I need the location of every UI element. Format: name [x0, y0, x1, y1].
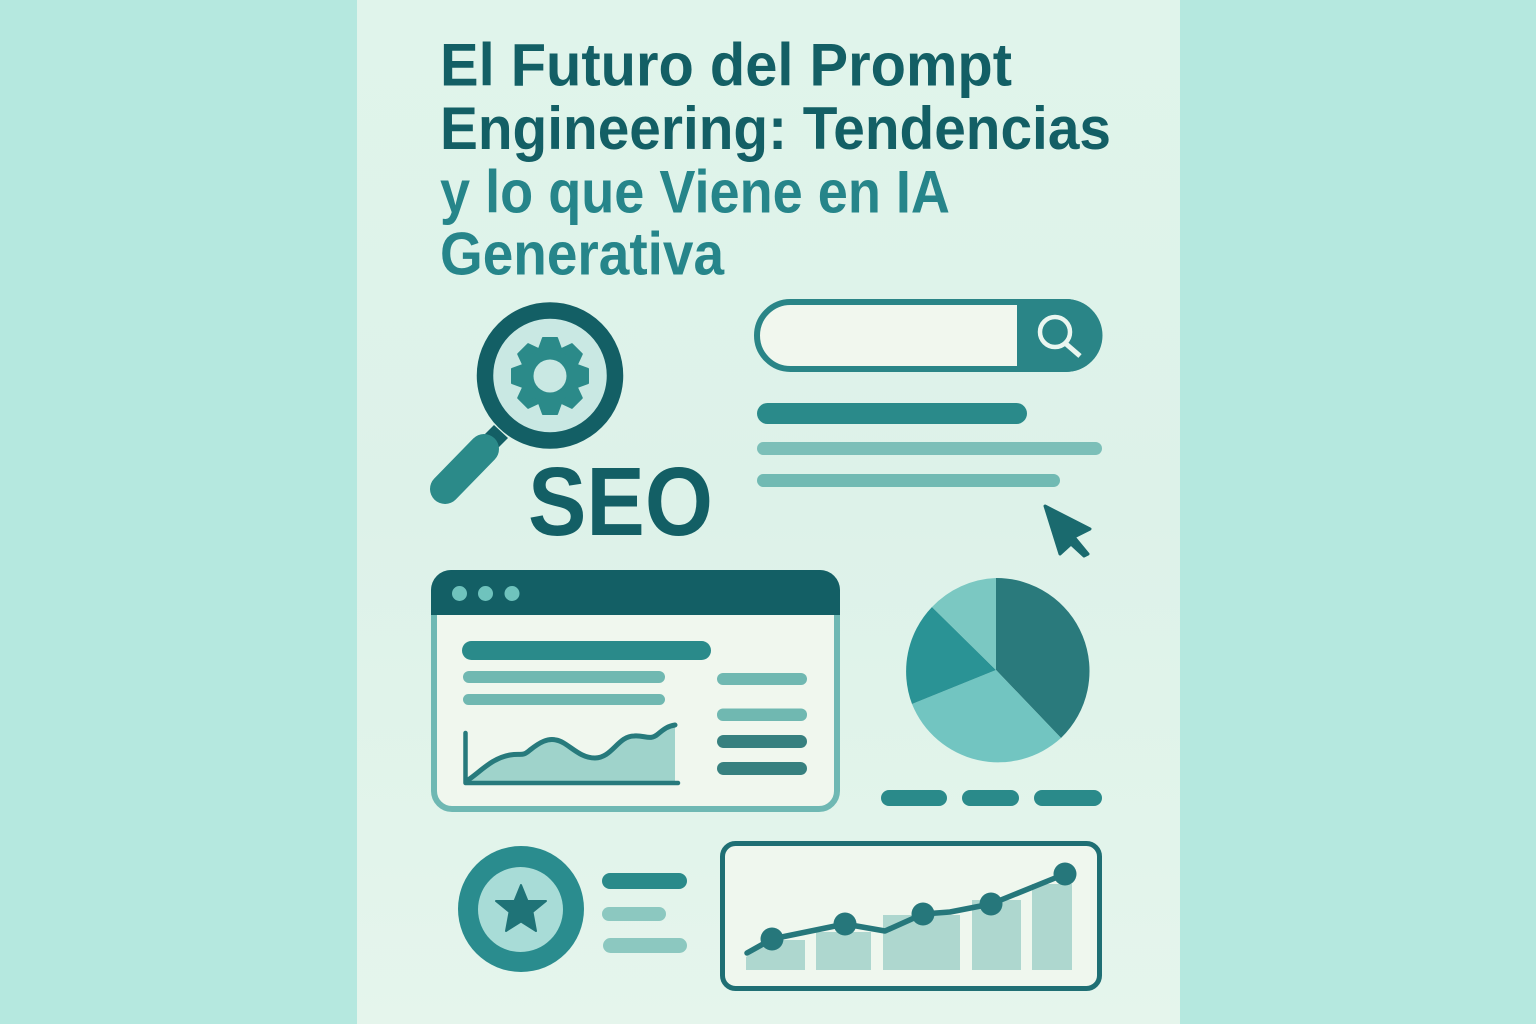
icon: star badge: [458, 846, 584, 972]
title: El Futuro del Prompt: [440, 32, 1012, 98]
icon: magnifying glass with gear: [445, 310, 615, 489]
icon: cursor arrow: [1045, 506, 1090, 556]
pie chart: [906, 578, 1090, 762]
content lines: [462, 641, 711, 705]
central panel: [357, 0, 1180, 1024]
trend line: [747, 874, 1065, 953]
pie legend pills: [881, 790, 1102, 806]
title: Generativa: [440, 220, 725, 288]
data points: [760, 862, 1076, 950]
search result lines: [757, 403, 1102, 487]
icon: search: [1040, 317, 1080, 356]
window dots: [452, 586, 520, 601]
sidebar lines: [717, 673, 807, 775]
window header: [431, 570, 840, 615]
growth chart panel: [722, 844, 1100, 988]
bars: [746, 884, 1072, 970]
title: Engineering: Tendencias: [440, 95, 1111, 162]
title: y lo que Viene en IA: [440, 158, 950, 226]
area chart: [466, 725, 678, 783]
badge text lines: [602, 873, 687, 953]
search bar: [757, 299, 1102, 372]
SEO label: SEO: [528, 447, 713, 556]
title: [440, 32, 1111, 288]
browser window: [431, 570, 840, 809]
